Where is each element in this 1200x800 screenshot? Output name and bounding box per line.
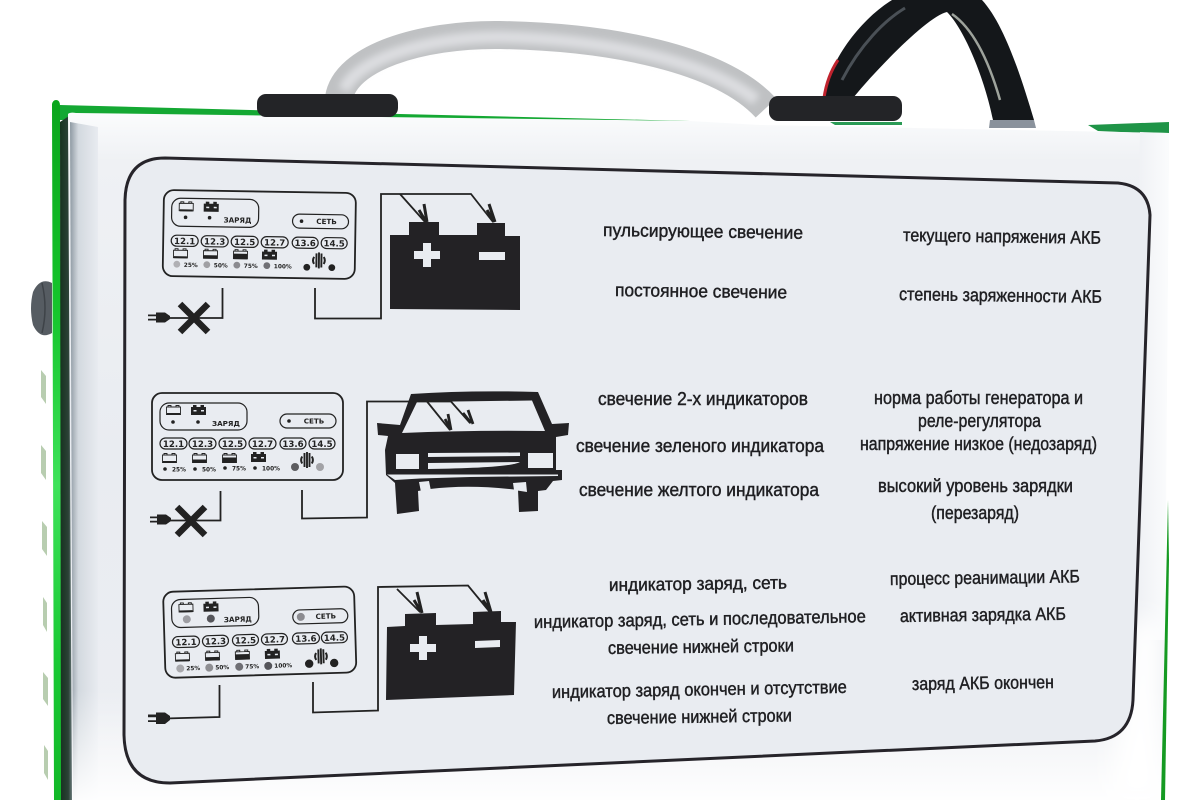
indicator panel 2: 12.3	[192, 440, 213, 450]
wire to battery with clamps	[315, 194, 495, 318]
windshield	[402, 400, 545, 433]
battery icon	[390, 222, 520, 310]
led state: pulsing: пульсирующее свечение	[603, 220, 803, 243]
led state: charge and mains: индикатор заряд, сеть	[609, 573, 787, 595]
indicator panel 2	[152, 393, 343, 480]
indicator panel 3: 12.7	[264, 635, 285, 646]
indicator panel 2: 13.6	[282, 440, 304, 450]
left cable gland	[257, 94, 398, 117]
indicator panel 2: 12.7	[252, 440, 273, 450]
meaning: current voltage: текущего напряжения АКБ	[903, 225, 1101, 248]
indicator panel 3: 100%	[274, 663, 292, 670]
indicator panel 2: СЕТЬ	[304, 416, 324, 426]
indicator panel 1: СЕТЬ	[316, 217, 337, 226]
led state: constant: постоянное свечение	[615, 280, 787, 302]
indicator panel 2: 12.5	[222, 440, 243, 450]
indicator panel 1: 12.3	[204, 237, 225, 248]
indicator panel 2: 25%	[172, 468, 186, 474]
indicator panel 3: 75%	[245, 664, 259, 671]
indicator panel 1: 25%	[184, 263, 198, 269]
panel 1: disconnected charger, battery	[148, 190, 520, 332]
plate right bend	[1130, 132, 1169, 640]
black power cables	[823, 0, 1036, 128]
meaning: high charge: высокий уровень зарядки	[878, 476, 1073, 496]
green top edge, right fragment	[1088, 122, 1169, 134]
panel 2: disconnected charger, car	[150, 391, 569, 535]
indicator panel 1: 14.5	[323, 239, 345, 250]
headlights	[396, 454, 419, 469]
indicator panel 3: ЗАРЯД	[224, 614, 252, 624]
indicator panel 1: 75%	[244, 264, 258, 270]
status text: row 1	[603, 220, 1102, 307]
indicator panel 2: ЗАРЯД	[212, 419, 240, 428]
meaning: generator normal: норма работы генератора и	[874, 388, 1083, 408]
indicator panel 1	[163, 190, 356, 279]
indicator panel 1: ЗАРЯД	[223, 215, 251, 225]
meaning: charge finished: заряд АКБ окончен	[912, 672, 1054, 694]
indicator panel 3: СЕТЬ	[315, 611, 336, 621]
instruction frame	[124, 158, 1150, 783]
indicator panel 3: 25%	[186, 666, 200, 672]
side ventilation ticks	[41, 370, 48, 780]
meaning: low voltage: напряжение низкое (недозаряд)	[860, 434, 1097, 454]
indicator panel 3: 12.3	[205, 637, 226, 648]
white front plate	[68, 113, 1169, 800]
plate left bend	[70, 122, 98, 800]
mains wire with plug, crossed out (car)	[150, 491, 220, 535]
indicator panel 2: 14.5	[311, 440, 333, 450]
grey carrying handle	[339, 35, 766, 108]
bolt on side of the case	[31, 281, 52, 335]
indicator panel 3: 12.5	[235, 636, 256, 647]
green right edge	[1161, 500, 1169, 800]
meaning: active charge: активная зарядка АКБ	[900, 604, 1066, 626]
panel 3: connected charger, battery	[148, 586, 516, 724]
led state: finished: индикатор заряд окончен и отсутствие	[552, 677, 847, 702]
indicator panel 1: 100%	[274, 264, 292, 271]
status text: row 3	[534, 566, 1080, 728]
wire to battery with clamps (charging)	[313, 586, 491, 712]
dark inner side of the case	[60, 114, 74, 800]
led state: sequential line 2: свечение нижней строки	[608, 635, 794, 658]
indicator panel 2: 75%	[232, 466, 246, 472]
led state: yellow: свечение желтого индикатора	[579, 480, 820, 500]
indicator panel 1: 50%	[214, 263, 228, 270]
mains wire with plug, crossed out	[148, 288, 222, 332]
indicator panel 1: 12.1	[174, 237, 195, 247]
indicator panel 2: 12.1	[163, 440, 184, 450]
indicator panel 1: 12.7	[264, 238, 285, 249]
meaning: charge level: степень заряженности АКБ	[899, 284, 1102, 307]
mains wire with plug	[148, 685, 220, 724]
led state: green: свечение зеленого индикатора	[576, 436, 825, 456]
right cable gland	[769, 96, 902, 121]
led state: finished line 2: свечение нижней строки	[607, 705, 792, 728]
car front icon	[377, 391, 569, 514]
green centre edge fragment under cable gland	[830, 122, 902, 125]
led state: sequential: индикатор заряд, сеть и последовательное	[534, 606, 866, 632]
indicator panel 3: 50%	[215, 665, 229, 671]
right fade of the plate	[1110, 620, 1163, 800]
indicator panel 1: 12.5	[234, 238, 255, 248]
bottom fade of the plate	[72, 690, 1163, 800]
green side edge of the case	[52, 100, 62, 800]
meaning: reanimation: процесс реанимации АКБ	[890, 566, 1080, 589]
indicator panel 3	[163, 586, 356, 678]
led state: two indicators: свечение 2-х индикаторов	[598, 389, 808, 409]
grille slots	[428, 452, 520, 457]
wire to car battery with clamps	[302, 402, 473, 518]
bumper gap	[387, 474, 558, 480]
green top edge of the case	[60, 105, 690, 121]
status text: row 2	[576, 388, 1097, 523]
battery icon (charging)	[386, 611, 516, 700]
meaning: regulator: реле-регулятора	[918, 411, 1042, 431]
meaning: overcharge: (перезаряд)	[931, 503, 1019, 523]
indicator panel 2: 100%	[262, 466, 280, 472]
indicator panel 1: 13.6	[294, 239, 316, 249]
indicator panel 3: 14.5	[324, 633, 345, 644]
indicator panel 2: 50%	[202, 468, 216, 474]
indicator panel 3: 12.1	[175, 638, 197, 648]
indicator panel 3: 13.6	[295, 634, 317, 645]
